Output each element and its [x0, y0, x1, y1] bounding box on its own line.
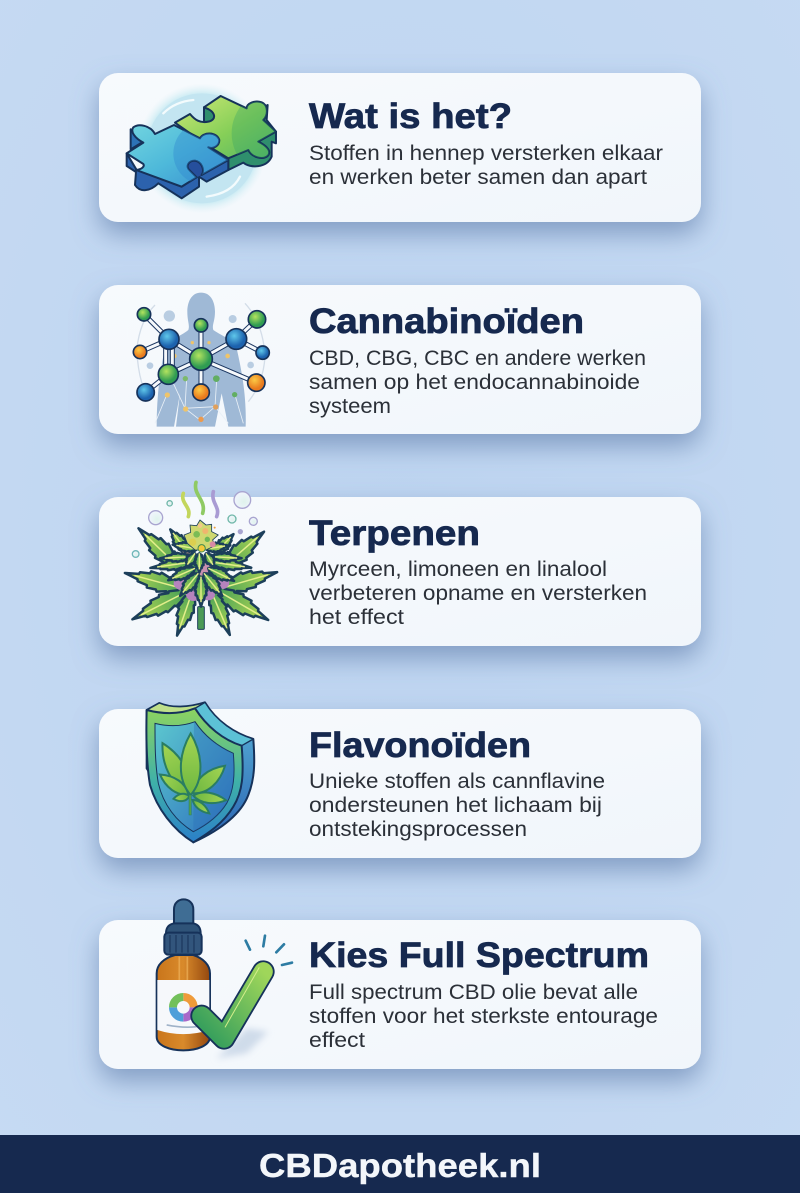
description: effect — [309, 1029, 365, 1052]
panel: cannabinoiden — [99, 285, 701, 434]
card background — [99, 73, 701, 222]
description: het effect — [309, 606, 404, 629]
heading: Kies Full Spectrum — [309, 936, 649, 975]
description — [309, 347, 646, 418]
heading: Flavonoïden — [309, 726, 531, 765]
panel: wat is het — [99, 73, 701, 222]
heading: Cannabinoïden — [309, 302, 584, 341]
description: en werken beter samen dan apart — [309, 166, 647, 189]
footer brand name: CBDapotheek.nl — [259, 1147, 541, 1184]
card background — [99, 709, 701, 858]
description: samen op het endocannabinoide — [309, 371, 640, 394]
description — [309, 142, 663, 189]
icon: cannabis plant with aroma — [122, 482, 280, 638]
description — [309, 558, 647, 629]
description: ontstekingsprocessen — [309, 818, 527, 841]
description: Unieke stoffen als cannflavine — [309, 770, 605, 793]
icon: dropper bottle with check mark — [157, 899, 292, 1058]
description: Stoffen in hennep versterken elkaar — [309, 142, 663, 165]
icon: puzzle pieces — [126, 86, 277, 210]
icon: molecule network over body — [133, 293, 269, 427]
panel: terpenen — [99, 482, 701, 646]
panel: flavonoiden — [99, 702, 701, 858]
panel: kies full spectrum — [99, 899, 701, 1069]
footer bar — [0, 1135, 800, 1193]
description: stoffen voor het sterkste entourage — [309, 1005, 658, 1028]
card background — [99, 497, 701, 646]
heading: Wat is het? — [309, 97, 512, 136]
description: ondersteunen het lichaam bij — [309, 794, 602, 817]
card background — [99, 920, 701, 1069]
heading: Terpenen — [309, 514, 480, 553]
description: Full spectrum CBD olie bevat alle — [309, 981, 638, 1004]
description — [309, 981, 658, 1052]
icon: shield with leaf — [146, 702, 254, 842]
description: Myrceen, limoneen en linalool — [309, 558, 607, 581]
description — [309, 770, 605, 841]
description: CBD, CBG, CBC en andere werken — [309, 347, 646, 370]
description: systeem — [309, 395, 391, 418]
card background — [99, 285, 701, 434]
footer background — [0, 1135, 800, 1193]
description: verbeteren opname en versterken — [309, 582, 647, 605]
